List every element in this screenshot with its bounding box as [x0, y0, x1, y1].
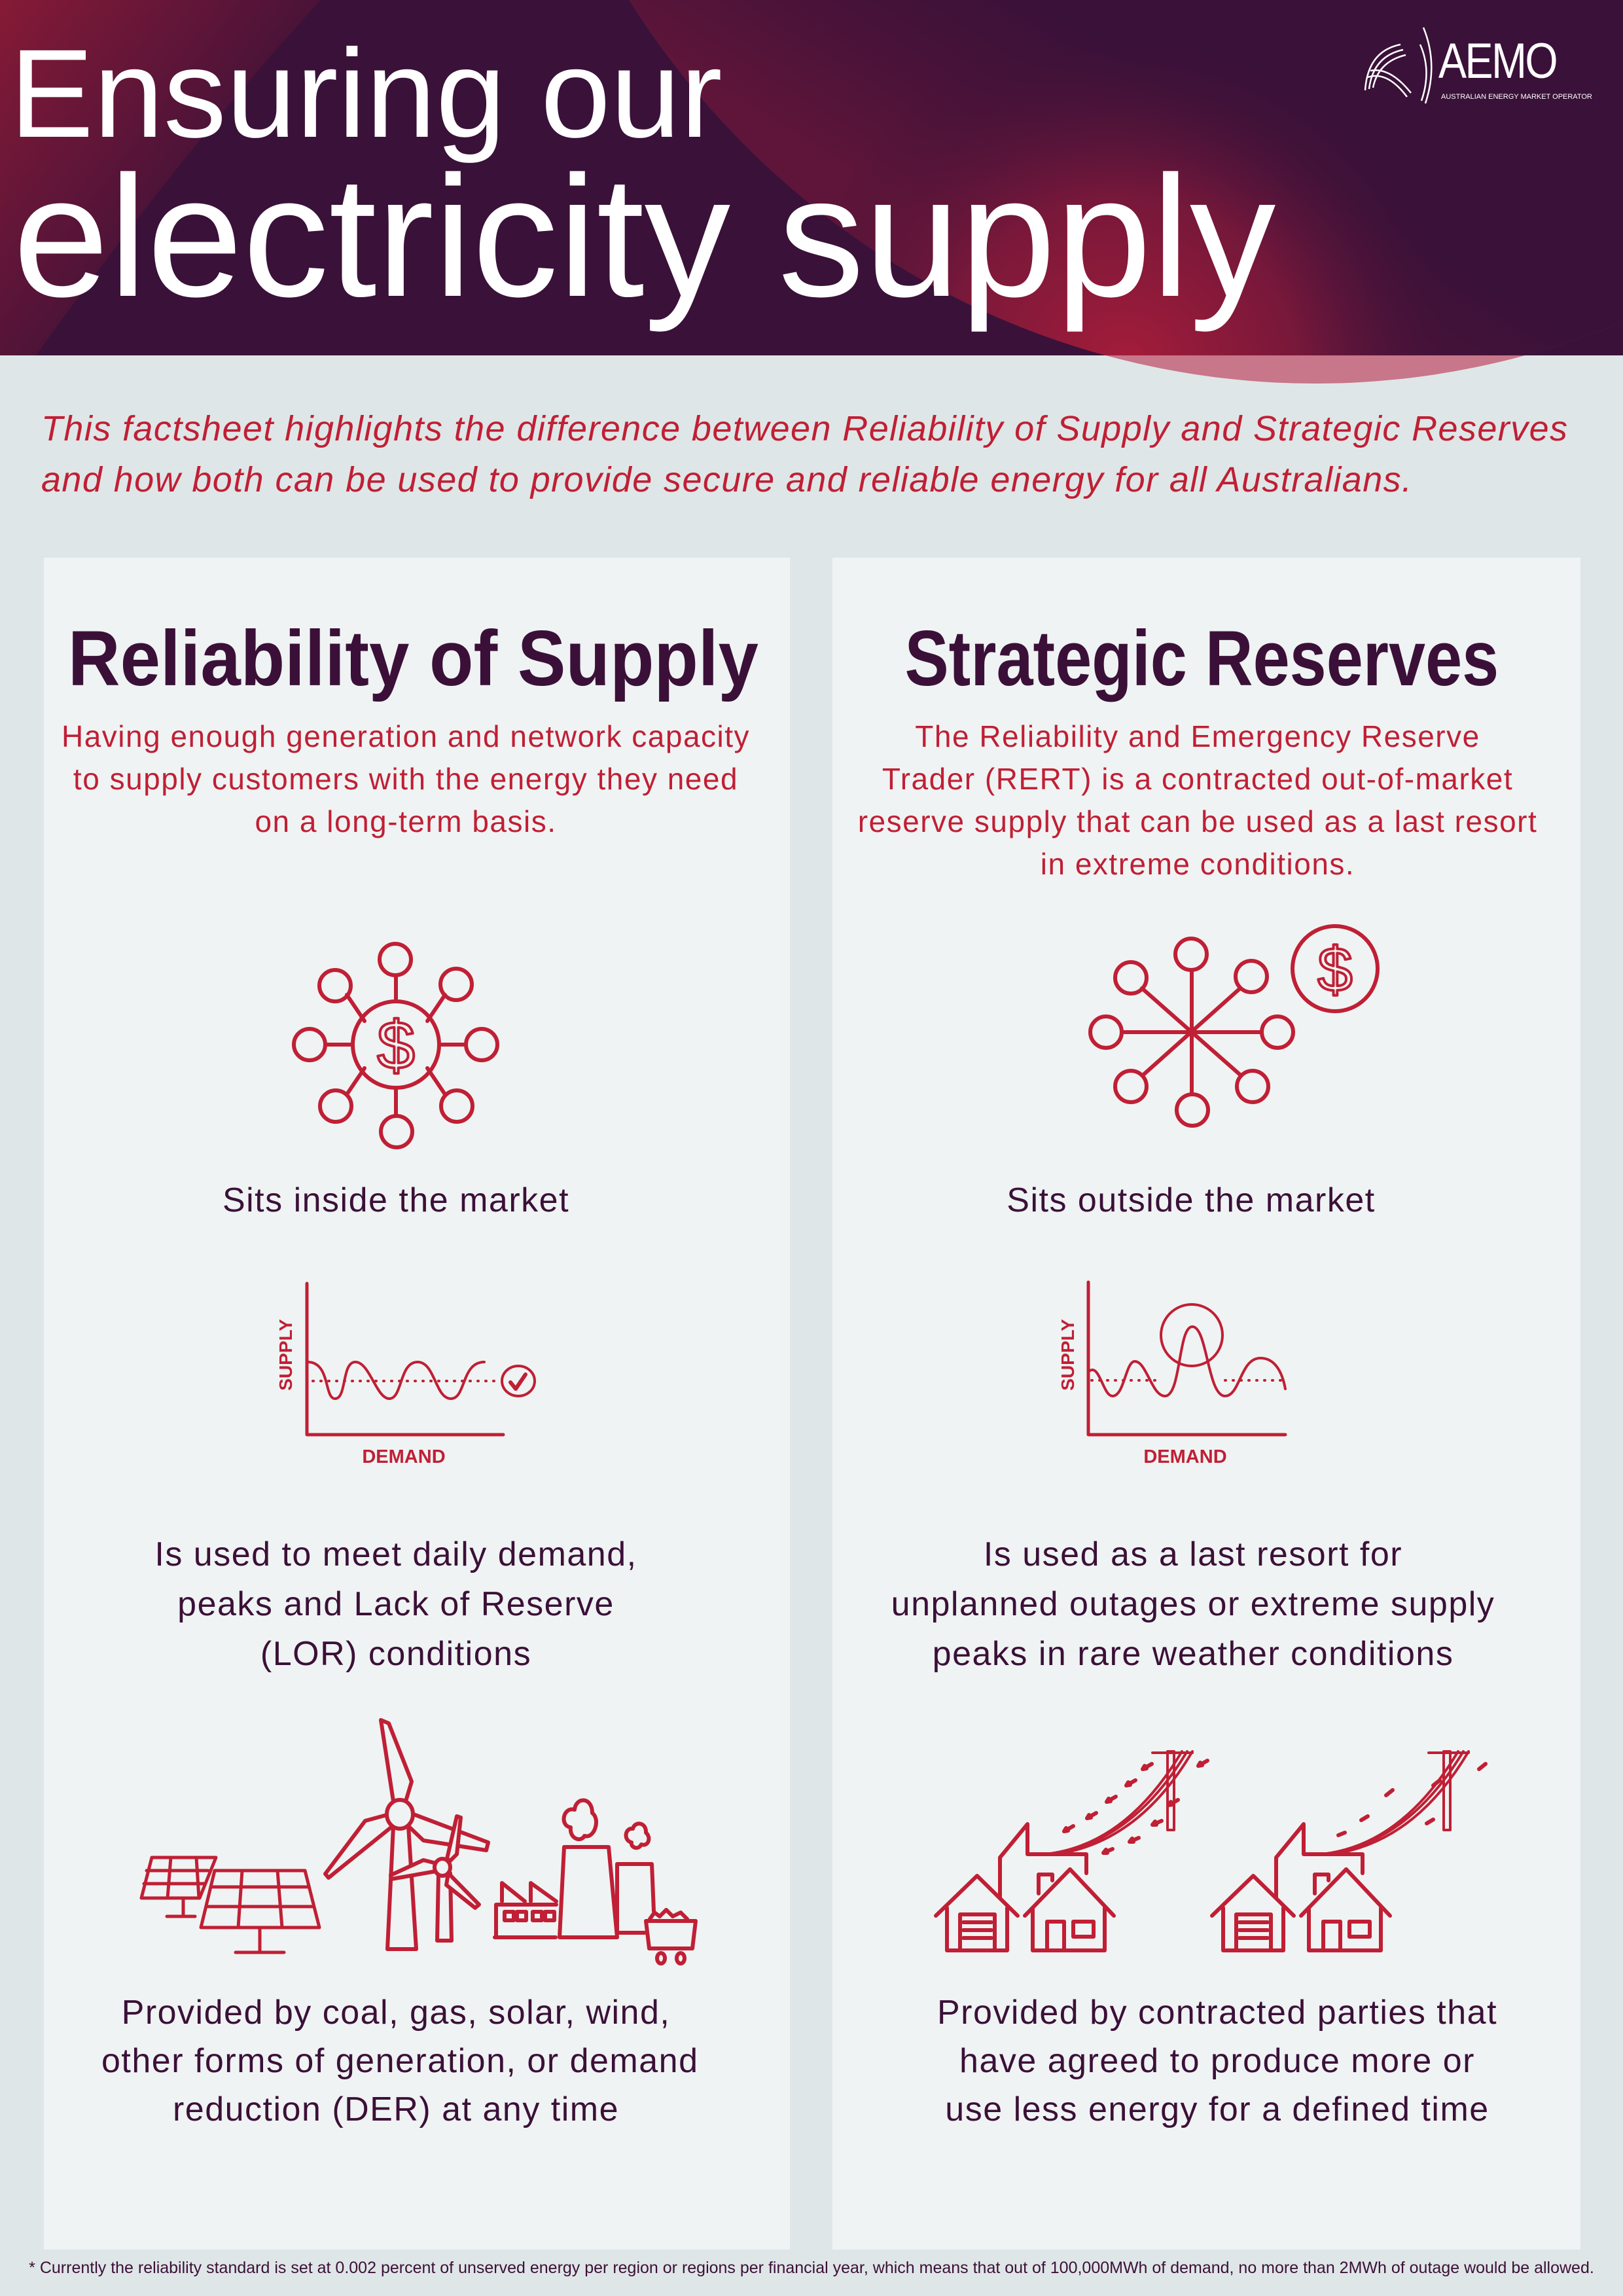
- logo: AEMO: [1364, 27, 1592, 103]
- intro text: [41, 409, 1568, 499]
- definition: RERT: Trader (RERT) is a contracted out-of-market: [882, 762, 1513, 796]
- icon: market network with dollar: $: [377, 1008, 415, 1084]
- caption: outside market: Sits outside the market: [1007, 1181, 1376, 1219]
- definition: reliability: Having enough generation and network capacity: [62, 719, 750, 753]
- text: provided by contracted parties: have agreed to produce more or: [959, 2042, 1475, 2080]
- wind turbines: [325, 1720, 488, 1949]
- definition: RERT: reserve supply that can be used as a last resort: [858, 804, 1537, 838]
- icon: solar wind and coal generation: [140, 1718, 698, 1965]
- coal plant: [495, 1801, 696, 1964]
- chart: extreme peak: SUPPLY: [1058, 1319, 1078, 1391]
- definition: reliability: to supply customers with the energy they need: [73, 762, 738, 796]
- house group: few arrows: [1212, 1751, 1469, 1950]
- text: provided by generation: [101, 1994, 698, 2128]
- title: electricity supply: [13, 140, 1275, 332]
- definition: reliability: [62, 719, 750, 838]
- text: last resort use: Is used as a last resort for: [984, 1535, 1402, 1573]
- text: last resort use: [891, 1535, 1495, 1673]
- chart: steady supply vs demand: DEMAND: [362, 1446, 446, 1467]
- logo: AEMO: AEMO: [1438, 33, 1556, 89]
- heading: reliability of supply: Reliability of Supply: [67, 615, 758, 702]
- icon: outside market network: [1088, 924, 1380, 1128]
- intro text: This factsheet highlights the difference between Reliability of Supply and Strategic Reserves: [41, 409, 1568, 448]
- panel: reliability of supply: [44, 558, 790, 2250]
- text: daily demand use: [154, 1535, 637, 1673]
- chart: extreme peak: DEMAND: [1143, 1446, 1227, 1467]
- chart: extreme peak: [1058, 1280, 1287, 1467]
- text: daily demand use: (LOR) conditions: [260, 1635, 531, 1673]
- icon: outside market network: $: [1317, 935, 1353, 1005]
- intro text: and how both can be used to provide secure and reliable energy for all Australians.: [41, 460, 1412, 499]
- solar panels: [141, 1857, 319, 1952]
- house group: many arrows: [936, 1751, 1192, 1950]
- panel: strategic reserves: [832, 558, 1580, 2250]
- footnote: * Currently the reliability standard is set at 0.002 percent of unserved energy per region or regions per financial year, which means that out of 100,000MWh of demand, no more than 2MWh of outage would be allowed.: [29, 2259, 1594, 2277]
- header banner: [0, 0, 1623, 384]
- icon: market network with dollar: [292, 942, 499, 1149]
- definition: RERT: The Reliability and Emergency Reserve: [915, 719, 1480, 753]
- definition: RERT: in extreme conditions.: [1041, 847, 1355, 881]
- text: provided by contracted parties: use less energy for a defined time: [945, 2090, 1489, 2128]
- text: last resort use: peaks in rare weather conditions: [933, 1635, 1454, 1673]
- text: provided by contracted parties: [937, 1994, 1497, 2128]
- logo: AEMO: AUSTRALIAN ENERGY MARKET OPERATOR: [1441, 93, 1592, 101]
- chart: steady supply vs demand: SUPPLY: [276, 1319, 296, 1391]
- text: last resort use: unplanned outages or extreme supply: [891, 1585, 1495, 1623]
- definition: RERT: [858, 719, 1537, 881]
- caption: inside market: Sits inside the market: [223, 1181, 569, 1219]
- text: provided by generation: other forms of generation, or demand: [101, 2042, 698, 2080]
- icon: contracted parties houses and power lines: [934, 1750, 1488, 1952]
- title: Ensuring our: [10, 23, 722, 164]
- title: [10, 23, 1275, 332]
- chart: steady supply vs demand: [276, 1282, 536, 1467]
- text: provided by generation: reduction (DER) at any time: [173, 2090, 619, 2128]
- definition: reliability: on a long-term basis.: [255, 804, 557, 838]
- heading: strategic reserves: Strategic Reserves: [904, 615, 1499, 702]
- text: provided by contracted parties: Provided by contracted parties that: [937, 1994, 1497, 2032]
- text: provided by generation: Provided by coal, gas, solar, wind,: [122, 1994, 670, 2032]
- text: daily demand use: Is used to meet daily demand,: [154, 1535, 637, 1573]
- text: daily demand use: peaks and Lack of Reserve: [177, 1585, 615, 1623]
